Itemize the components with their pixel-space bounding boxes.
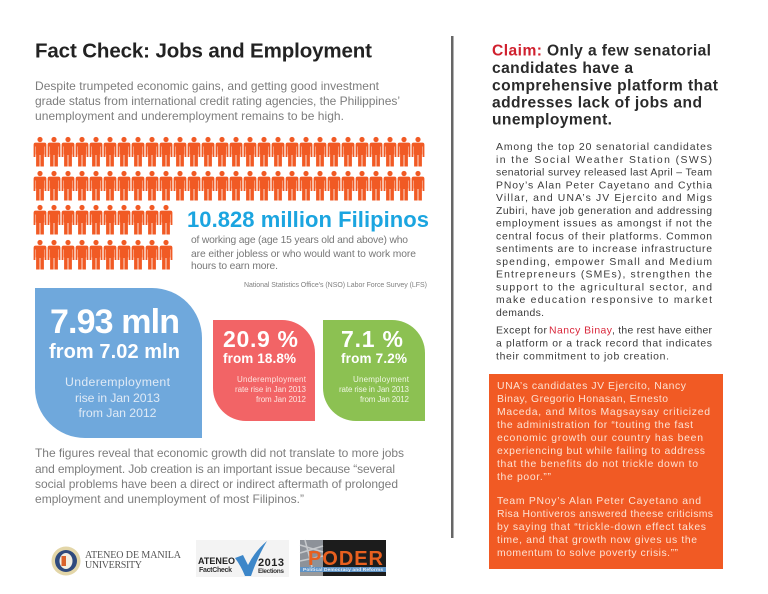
closing paragraph: The figures reveal that economic growth did not translate to more jobs xyxy=(35,446,404,460)
claim heading: comprehensive platform that xyxy=(492,78,718,94)
panel: candidates' criticisms: by saying that “trickle-down effect takes xyxy=(497,522,706,533)
statistic description: are either jobless or who would want to work more xyxy=(191,249,416,260)
statistic description xyxy=(191,235,416,272)
panel: underemployment rate: rate rise in Jan 2013 xyxy=(235,385,307,394)
logo: Ateneo FactCheck 2013 Elections: FactCheck xyxy=(199,567,232,574)
body text: Nancy Binay exception: Except for xyxy=(496,326,548,336)
panel: unemployment rate: rate rise in Jan 2013 xyxy=(339,385,410,394)
panel: underemployment 7.93 mln: rise in Jan 2013 xyxy=(75,391,160,405)
statistic description: of working age (age 15 years old and above) who xyxy=(191,235,408,246)
panel: candidates' criticisms: UNA’s candidates JV Ejercito, Nancy xyxy=(497,381,687,392)
logo: Ateneo de Manila University xyxy=(52,546,182,576)
body text: Nancy Binay exception: their commitment to job creation. xyxy=(496,352,669,362)
body text: Nancy Binay exception xyxy=(496,326,713,362)
panel: unemployment rate xyxy=(323,320,425,421)
body text: senatorial platforms: Zubiri, have job generation and addressing xyxy=(496,206,712,217)
logo: Ateneo FactCheck 2013 Elections: ATENEO xyxy=(198,556,235,566)
body text: senatorial platforms: make education responsive to market xyxy=(496,295,712,306)
panel: underemployment rate xyxy=(213,320,315,421)
column divider xyxy=(451,36,454,538)
panel: candidates' criticisms xyxy=(489,374,723,569)
body text: senatorial platforms: in the Social Weather Station (SWS) xyxy=(496,155,712,166)
claim heading: candidates have a xyxy=(492,60,633,77)
headline statistic: 10.828 million Filipinos: 10.828 million Filipinos xyxy=(187,207,429,232)
intro paragraph: unemployment and underemployment remains to be high. xyxy=(35,109,344,123)
panel: candidates' criticisms: Team PNoy’s Alan Peter Cayetano and xyxy=(497,496,701,507)
body text: Nancy Binay exception: , the rest have either xyxy=(612,326,713,336)
panel: candidates' criticisms: that the benefits do not trickle down to xyxy=(497,459,698,470)
claim heading: Only a few senatorial xyxy=(547,42,711,60)
pictogram: rows of people xyxy=(34,137,424,270)
intro paragraph: grade status from international credit rating agencies, the Philippines’ xyxy=(35,94,400,108)
body text: senatorial platforms: central focus of their platforms. Common xyxy=(496,231,712,242)
panel: underemployment 7.93 mln: 7.93 mln xyxy=(50,303,180,341)
statistic description: hours to earn more. xyxy=(191,261,278,272)
title: Fact Check: Jobs and Employment xyxy=(35,40,372,62)
body text: senatorial platforms: PNoy’s Alan Peter Cayetano and Cythia xyxy=(496,180,712,191)
panel: candidates' criticisms: Risa Hontiveros answered theese criticisms xyxy=(497,509,713,520)
closing paragraph: and employment. Job creation is an important issue because “several xyxy=(35,462,395,476)
panel: underemployment rate: 20.9 % xyxy=(223,326,298,352)
panel: underemployment rate: Underemployment xyxy=(237,375,307,384)
logo: PODER xyxy=(300,540,386,576)
body text: senatorial platforms: Among the top 20 senatorial candidates xyxy=(496,142,712,153)
claim heading: addresses lack of jobs and xyxy=(492,94,702,112)
panel: candidates' criticisms: time, and that growth now gives us the xyxy=(497,535,697,546)
closing paragraph: social problems have been a direct or indirect aftermath of prolonged xyxy=(35,477,398,491)
closing paragraph xyxy=(35,446,404,506)
body text: senatorial platforms: support to the agricultural sector, and xyxy=(496,282,712,294)
source note: National Statistics Office's (NSO) Labor Force Survey (LFS) xyxy=(244,282,427,289)
body text: Nancy Binay exception: a platform or a track record that indicates xyxy=(496,338,712,350)
body text: senatorial platforms: Villar, and UNA’s JV Ejercito and Migs xyxy=(496,193,712,204)
claim heading xyxy=(492,42,718,128)
body text: senatorial platforms: senatorial survey released last April – Team xyxy=(496,168,712,178)
panel: underemployment rate: from Jan 2012 xyxy=(256,395,307,404)
intro paragraph xyxy=(35,79,400,123)
logo: Ateneo FactCheck 2013 Elections xyxy=(196,540,289,577)
panel: candidates' criticisms: economic growth our country has been xyxy=(497,433,703,444)
logo: Ateneo FactCheck 2013 Elections: 2013 xyxy=(258,557,284,569)
panel: underemployment 7.93 mln: from 7.02 mln xyxy=(49,341,180,363)
panel: unemployment rate: from Jan 2012 xyxy=(360,395,410,404)
body text: senatorial platforms: demands. xyxy=(496,308,544,319)
panel: unemployment rate: from 7.2% xyxy=(341,351,407,366)
logo: Ateneo FactCheck 2013 Elections: Elections xyxy=(258,568,284,575)
body text: senatorial platforms: employment issues as amongst if not the xyxy=(496,219,712,230)
body text: senatorial platforms: spending, empower Small and Medium xyxy=(496,257,712,268)
panel: underemployment 7.93 mln: Underemployment xyxy=(65,375,171,389)
body text: senatorial platforms xyxy=(496,142,712,319)
panel: candidates' criticisms: Maceda, and Mitos Magsaysay criticized xyxy=(497,407,710,418)
panel: unemployment rate: Unemployment xyxy=(353,375,410,384)
body text: senatorial platforms: sentiments are to increase infrastructure xyxy=(496,244,712,255)
logo: PODER: Political Democracy and Reforms xyxy=(303,567,383,573)
panel: underemployment rate: from 18.8% xyxy=(223,351,296,366)
panel: candidates' criticisms: Binay, Gregorio Honasan, Ernesto xyxy=(497,394,668,405)
logo: PODER: PODER xyxy=(308,548,384,570)
claim heading: Claim: xyxy=(492,42,542,60)
closing paragraph: employment and unemployment of most Filipinos.” xyxy=(35,492,304,506)
claim heading: unemployment. xyxy=(492,112,612,128)
logo: Ateneo de Manila University: ATENEO DE MANILA xyxy=(85,550,182,561)
logo: Ateneo de Manila University: UNIVERSITY xyxy=(85,560,142,571)
panel: candidates' criticisms: the poor.”” xyxy=(497,472,552,483)
panel: unemployment rate: 7.1 % xyxy=(341,326,403,352)
panel: underemployment 7.93 mln: from Jan 2012 xyxy=(78,406,157,420)
panel: candidates' criticisms: momentum to solve poverty crisis.”” xyxy=(497,548,679,559)
body text: senatorial platforms: Entrepreneurs (SMEs), strengthen the xyxy=(496,270,712,281)
panel: candidates' criticisms: the administration for “touting the fast xyxy=(497,420,693,431)
intro paragraph: Despite trumpeted economic gains, and getting good investment xyxy=(35,79,380,93)
body text: Nancy Binay exception: Nancy Binay xyxy=(549,326,613,336)
panel: candidates' criticisms: experiencing but while failing to address xyxy=(497,446,705,457)
panel: underemployment 7.93 mln xyxy=(35,288,202,438)
